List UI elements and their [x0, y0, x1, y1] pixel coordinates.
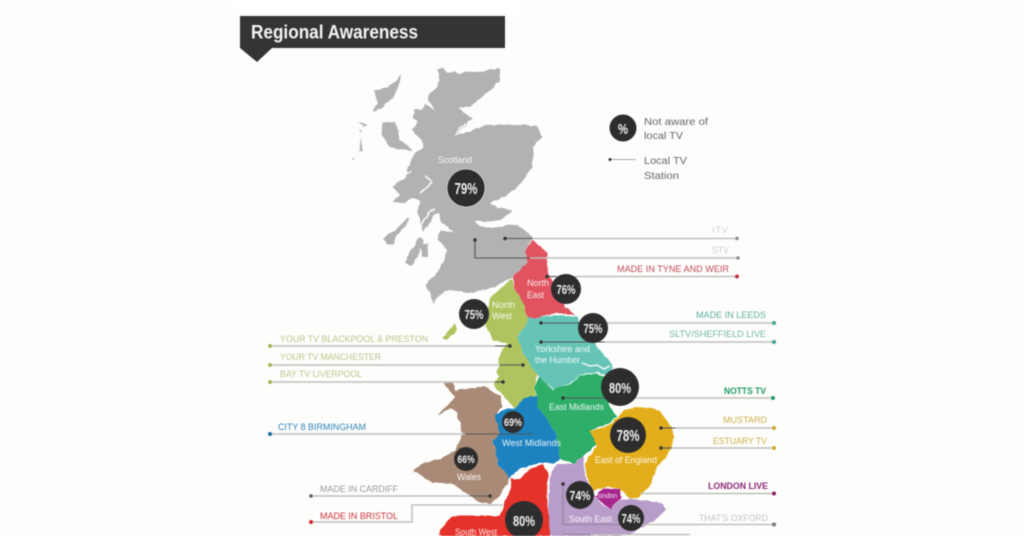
region name labels: London — [595, 493, 617, 500]
region: Scotland — [353, 67, 542, 303]
region name labels: North — [527, 278, 549, 288]
region name labels: West — [492, 311, 512, 321]
station labels, right side: SLTV/SHEFFIELD LIVE — [669, 329, 766, 339]
station labels, right side: MADE IN TYNE AND WEIR — [617, 264, 729, 274]
station labels, left side: YOUR TV MANCHESTER — [280, 352, 381, 362]
station labels, left side: MADE IN BRISTOL — [320, 511, 398, 521]
station labels, right side: LONDON LIVE — [708, 481, 768, 491]
station labels, left side: CITY 8 BIRMINGHAM — [278, 422, 366, 432]
region: West Midlands — [492, 396, 560, 479]
region: Wales — [413, 381, 510, 504]
percentage badge: Yorkshire 75%: 75% — [584, 321, 603, 336]
station dots — [268, 237, 776, 527]
percentage badge: East of England 78%: 78% — [616, 428, 640, 445]
legend: not aware text: Not aware of — [644, 117, 708, 128]
region name labels: West Midlands — [502, 438, 561, 448]
percentage badge: Yorkshire 75% — [578, 313, 608, 343]
region name labels: Scotland — [438, 155, 472, 165]
region name labels: East Midlands — [549, 402, 604, 412]
percentage badge: South West 80% — [505, 501, 543, 536]
percentage badge: Scotland 79%: 79% — [454, 181, 478, 198]
legend: percent icon: % — [618, 121, 628, 138]
region: East of England — [585, 407, 674, 499]
station labels, right side: NOTTS TV — [724, 386, 766, 396]
percentage badge: London 74%: 74% — [570, 488, 591, 503]
legend: local TV text: local TV — [644, 131, 683, 142]
percentage badge: North East 76%: 76% — [556, 282, 576, 297]
percentage badge: London 74% — [566, 481, 594, 509]
map of UK regions — [353, 67, 674, 536]
station labels, left side — [278, 334, 428, 521]
percentage badge: Wales 66%: 66% — [458, 454, 475, 466]
station labels, left side: YOUR TV BLACKPOOL & PRESTON — [280, 334, 428, 344]
region name labels: East of England — [595, 455, 657, 465]
percentage badge: South East 74%: 74% — [622, 511, 641, 526]
station labels, right side — [617, 225, 768, 523]
station labels, right side: MADE IN LEEDS — [696, 310, 766, 320]
percentage badge: South West 80%: 80% — [513, 513, 535, 530]
region: Yorkshire and the Humber — [517, 315, 612, 390]
percentage badge: North West 75%: 75% — [464, 307, 484, 322]
region: South East — [548, 456, 665, 536]
percentage badge: North West 75% — [459, 299, 489, 329]
percentage badge: North East 76% — [551, 274, 581, 304]
region: North West — [443, 278, 537, 409]
region name labels: Yorkshire and — [535, 344, 590, 354]
region: North East — [513, 240, 575, 318]
station labels, left side: BAY TV LIVERPOOL — [280, 369, 362, 379]
sea lochs — [400, 123, 465, 232]
legend: line sample — [608, 158, 636, 161]
region: London — [595, 488, 621, 509]
region: South West — [438, 464, 550, 536]
station labels, right side: ESTUARY TV — [713, 436, 767, 446]
region name labels: South East — [569, 514, 612, 524]
region name labels: the Humber — [535, 355, 580, 365]
percentage badge: East Midlands 80%: 80% — [609, 380, 631, 397]
percentage badge: South East 74% — [618, 505, 644, 531]
percentage badge: East of England 78% — [610, 417, 646, 453]
region name labels: North — [492, 300, 515, 310]
station labels, right side: STV — [712, 245, 729, 255]
percentage badge: West Midlands 69% — [502, 411, 524, 433]
region name labels — [438, 155, 657, 536]
percentage badge: East Midlands 80% — [601, 368, 639, 406]
station labels, right side: ITV — [712, 225, 728, 235]
station labels, left side: MADE IN CARDIFF — [320, 484, 398, 494]
region: East Midlands — [535, 373, 617, 464]
region name labels: East — [527, 290, 544, 300]
legend: local TV station text: Local TV — [644, 156, 687, 167]
title banner — [240, 16, 505, 62]
station labels, right side: THAT'S OXFORD — [699, 513, 768, 523]
title banner: Regional Awareness — [251, 22, 418, 44]
region name labels: Wales — [457, 472, 481, 482]
legend — [608, 114, 708, 182]
station leader lines — [270, 238, 775, 534]
legend: station text: Station — [644, 171, 679, 182]
percentage badge: Wales 66% — [454, 447, 478, 471]
Humber estuary line — [582, 363, 610, 369]
station labels, right side: MUSTARD — [723, 415, 767, 425]
percentage badge: Scotland 79% — [447, 169, 485, 207]
percentage badge: West Midlands 69%: 69% — [504, 417, 522, 429]
